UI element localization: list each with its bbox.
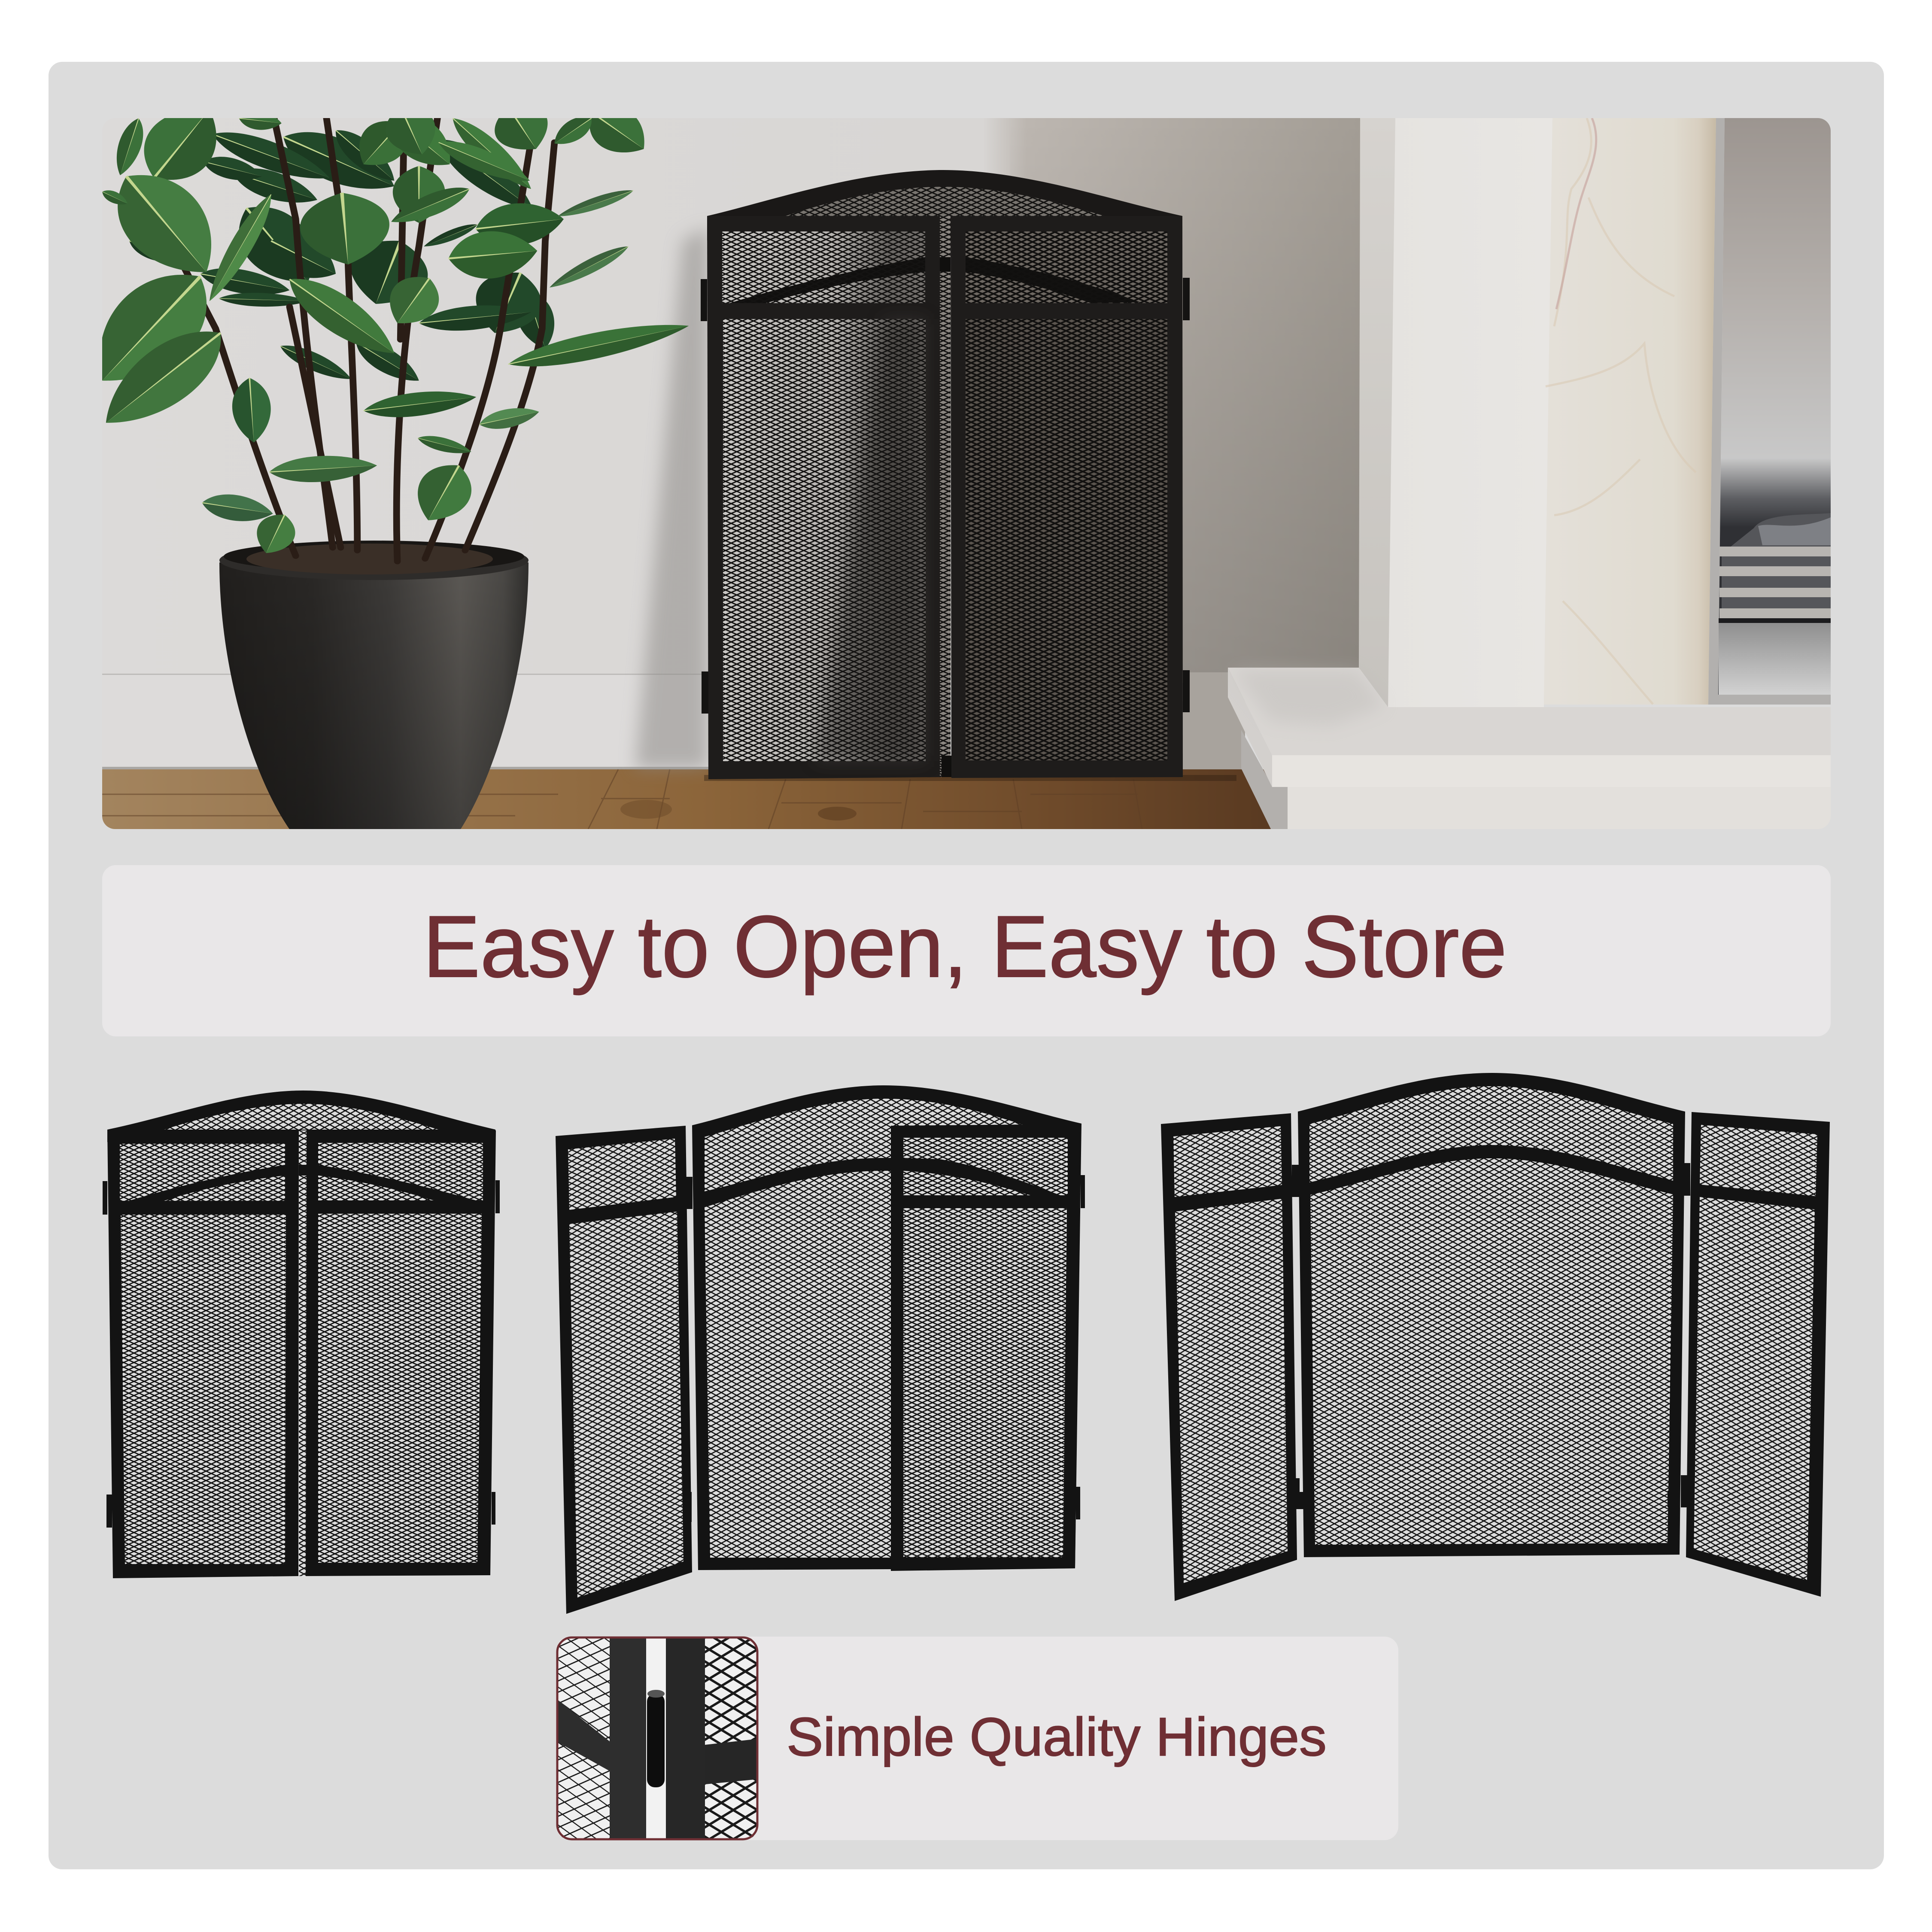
screen: half open [556, 1085, 1085, 1614]
right door top mesh [966, 231, 1167, 303]
heading bar [102, 865, 1831, 1036]
center panel [1298, 1073, 1685, 1557]
fireplace screen in photo [701, 170, 1190, 779]
rear arched panel [707, 170, 1182, 240]
hinge callout [556, 1637, 1398, 1840]
icon: hinge close-up [556, 1637, 758, 1840]
front leaves [70, 92, 692, 560]
left wing [1161, 1113, 1297, 1601]
heading text: Easy to Open, Easy to Store [423, 898, 1507, 996]
right door [951, 216, 1183, 778]
plant: rubber tree [70, 92, 692, 561]
baseboard left [102, 674, 712, 769]
stems [182, 118, 554, 561]
screen shadow on wall [635, 228, 708, 769]
front door [891, 1124, 1081, 1571]
wall [983, 118, 1360, 672]
plant pot [219, 541, 529, 829]
right door [306, 1130, 496, 1576]
left door [707, 216, 942, 779]
marble surround [1544, 118, 1716, 705]
back leaves [125, 118, 563, 390]
screen: closed position [103, 1091, 500, 1578]
fireplace column [1359, 118, 1552, 707]
hinges [103, 1180, 500, 1528]
hearth [1228, 668, 1831, 829]
left door lower mesh [723, 319, 926, 761]
center gap [940, 216, 951, 777]
steel fireplace insert [1708, 118, 1831, 705]
coals [1722, 513, 1831, 618]
left door top mesh [722, 231, 925, 303]
right wing [1686, 1112, 1830, 1597]
photo: fireplace room scene [70, 92, 1831, 829]
hinges [1292, 1163, 1692, 1509]
hinge caption: Simple Quality Hinges [787, 1707, 1327, 1767]
right door lower mesh [966, 319, 1167, 760]
left wing [556, 1126, 692, 1614]
center panel [692, 1085, 1081, 1570]
left door [107, 1130, 299, 1578]
wall shading right [1182, 287, 1360, 672]
grate bars [1719, 547, 1831, 618]
screen: fully open [1161, 1073, 1830, 1601]
wood floor [102, 769, 1296, 829]
baseboard right [1176, 672, 1245, 769]
hinges [685, 1175, 1085, 1522]
hinges [701, 278, 1190, 714]
